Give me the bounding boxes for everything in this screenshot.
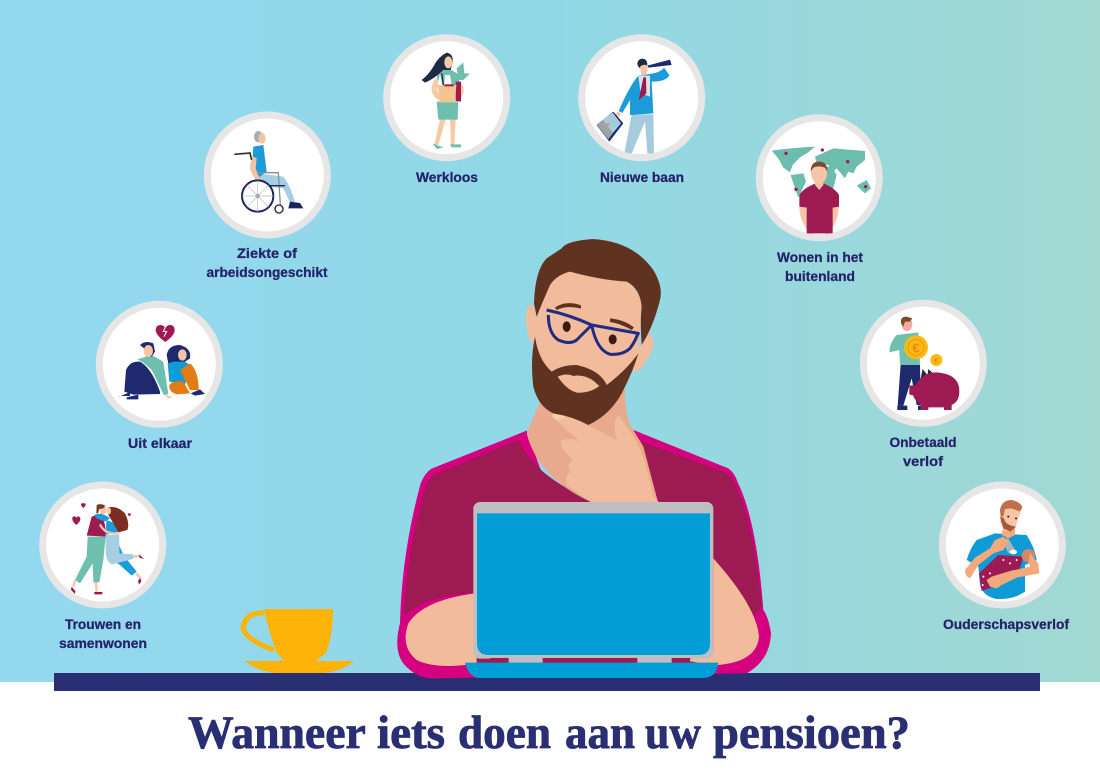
icon: person in wheelchair (234, 131, 303, 213)
panel: onbetaald verlof (863, 303, 983, 469)
panel: trouwen en samenwonen (43, 485, 163, 651)
thinking man with laptop (397, 239, 771, 678)
panel: ouderschapsverlof (942, 485, 1069, 632)
label: Ouderschapsverlof (943, 616, 1069, 632)
head (526, 239, 661, 425)
label: Trouwen en (65, 616, 141, 632)
label: Nieuwe baan (600, 169, 684, 185)
label: Uit elkaar (128, 435, 193, 451)
label: Ziekte of (237, 245, 297, 261)
arms (397, 558, 759, 678)
icon: father feeding baby (965, 500, 1039, 599)
icon: embracing couple (71, 503, 144, 594)
label: arbeidsongeschikt (206, 264, 328, 280)
title: aan (565, 707, 635, 759)
label: Wonen in het (777, 249, 863, 265)
title: pensioen? (713, 707, 910, 759)
panel: uit elkaar (99, 304, 219, 451)
label: buitenland (785, 268, 855, 284)
title: iets (377, 707, 445, 759)
shirt (397, 430, 771, 678)
icon: man with coin and piggy bank: € (934, 356, 938, 365)
panel: ziekte of arbeidsongeschikt (206, 115, 328, 280)
laptop (465, 502, 718, 678)
panel: wonen in het buitenland (759, 118, 879, 284)
icon: separated couple with broken heart (119, 325, 205, 399)
neck and hand (527, 390, 659, 503)
icon: man and world map (772, 147, 871, 234)
icon: woman carrying box (422, 53, 470, 149)
title: Wanneer (188, 707, 365, 759)
coffee cup (243, 609, 354, 673)
icon: man with coin and piggy bank: € (912, 340, 920, 355)
label: Onbetaald (890, 434, 956, 450)
label: samenwonen (59, 635, 147, 651)
icon: man with coin and piggy bank (889, 317, 959, 410)
panel: nieuwe baan (582, 38, 702, 185)
title: uw (645, 707, 701, 759)
icon: businessman with telescope (597, 59, 672, 153)
panel: werkloos (387, 38, 507, 185)
label: Werkloos (416, 169, 478, 185)
table (54, 673, 1040, 691)
label: verlof (903, 453, 943, 469)
title: doen (458, 707, 551, 759)
